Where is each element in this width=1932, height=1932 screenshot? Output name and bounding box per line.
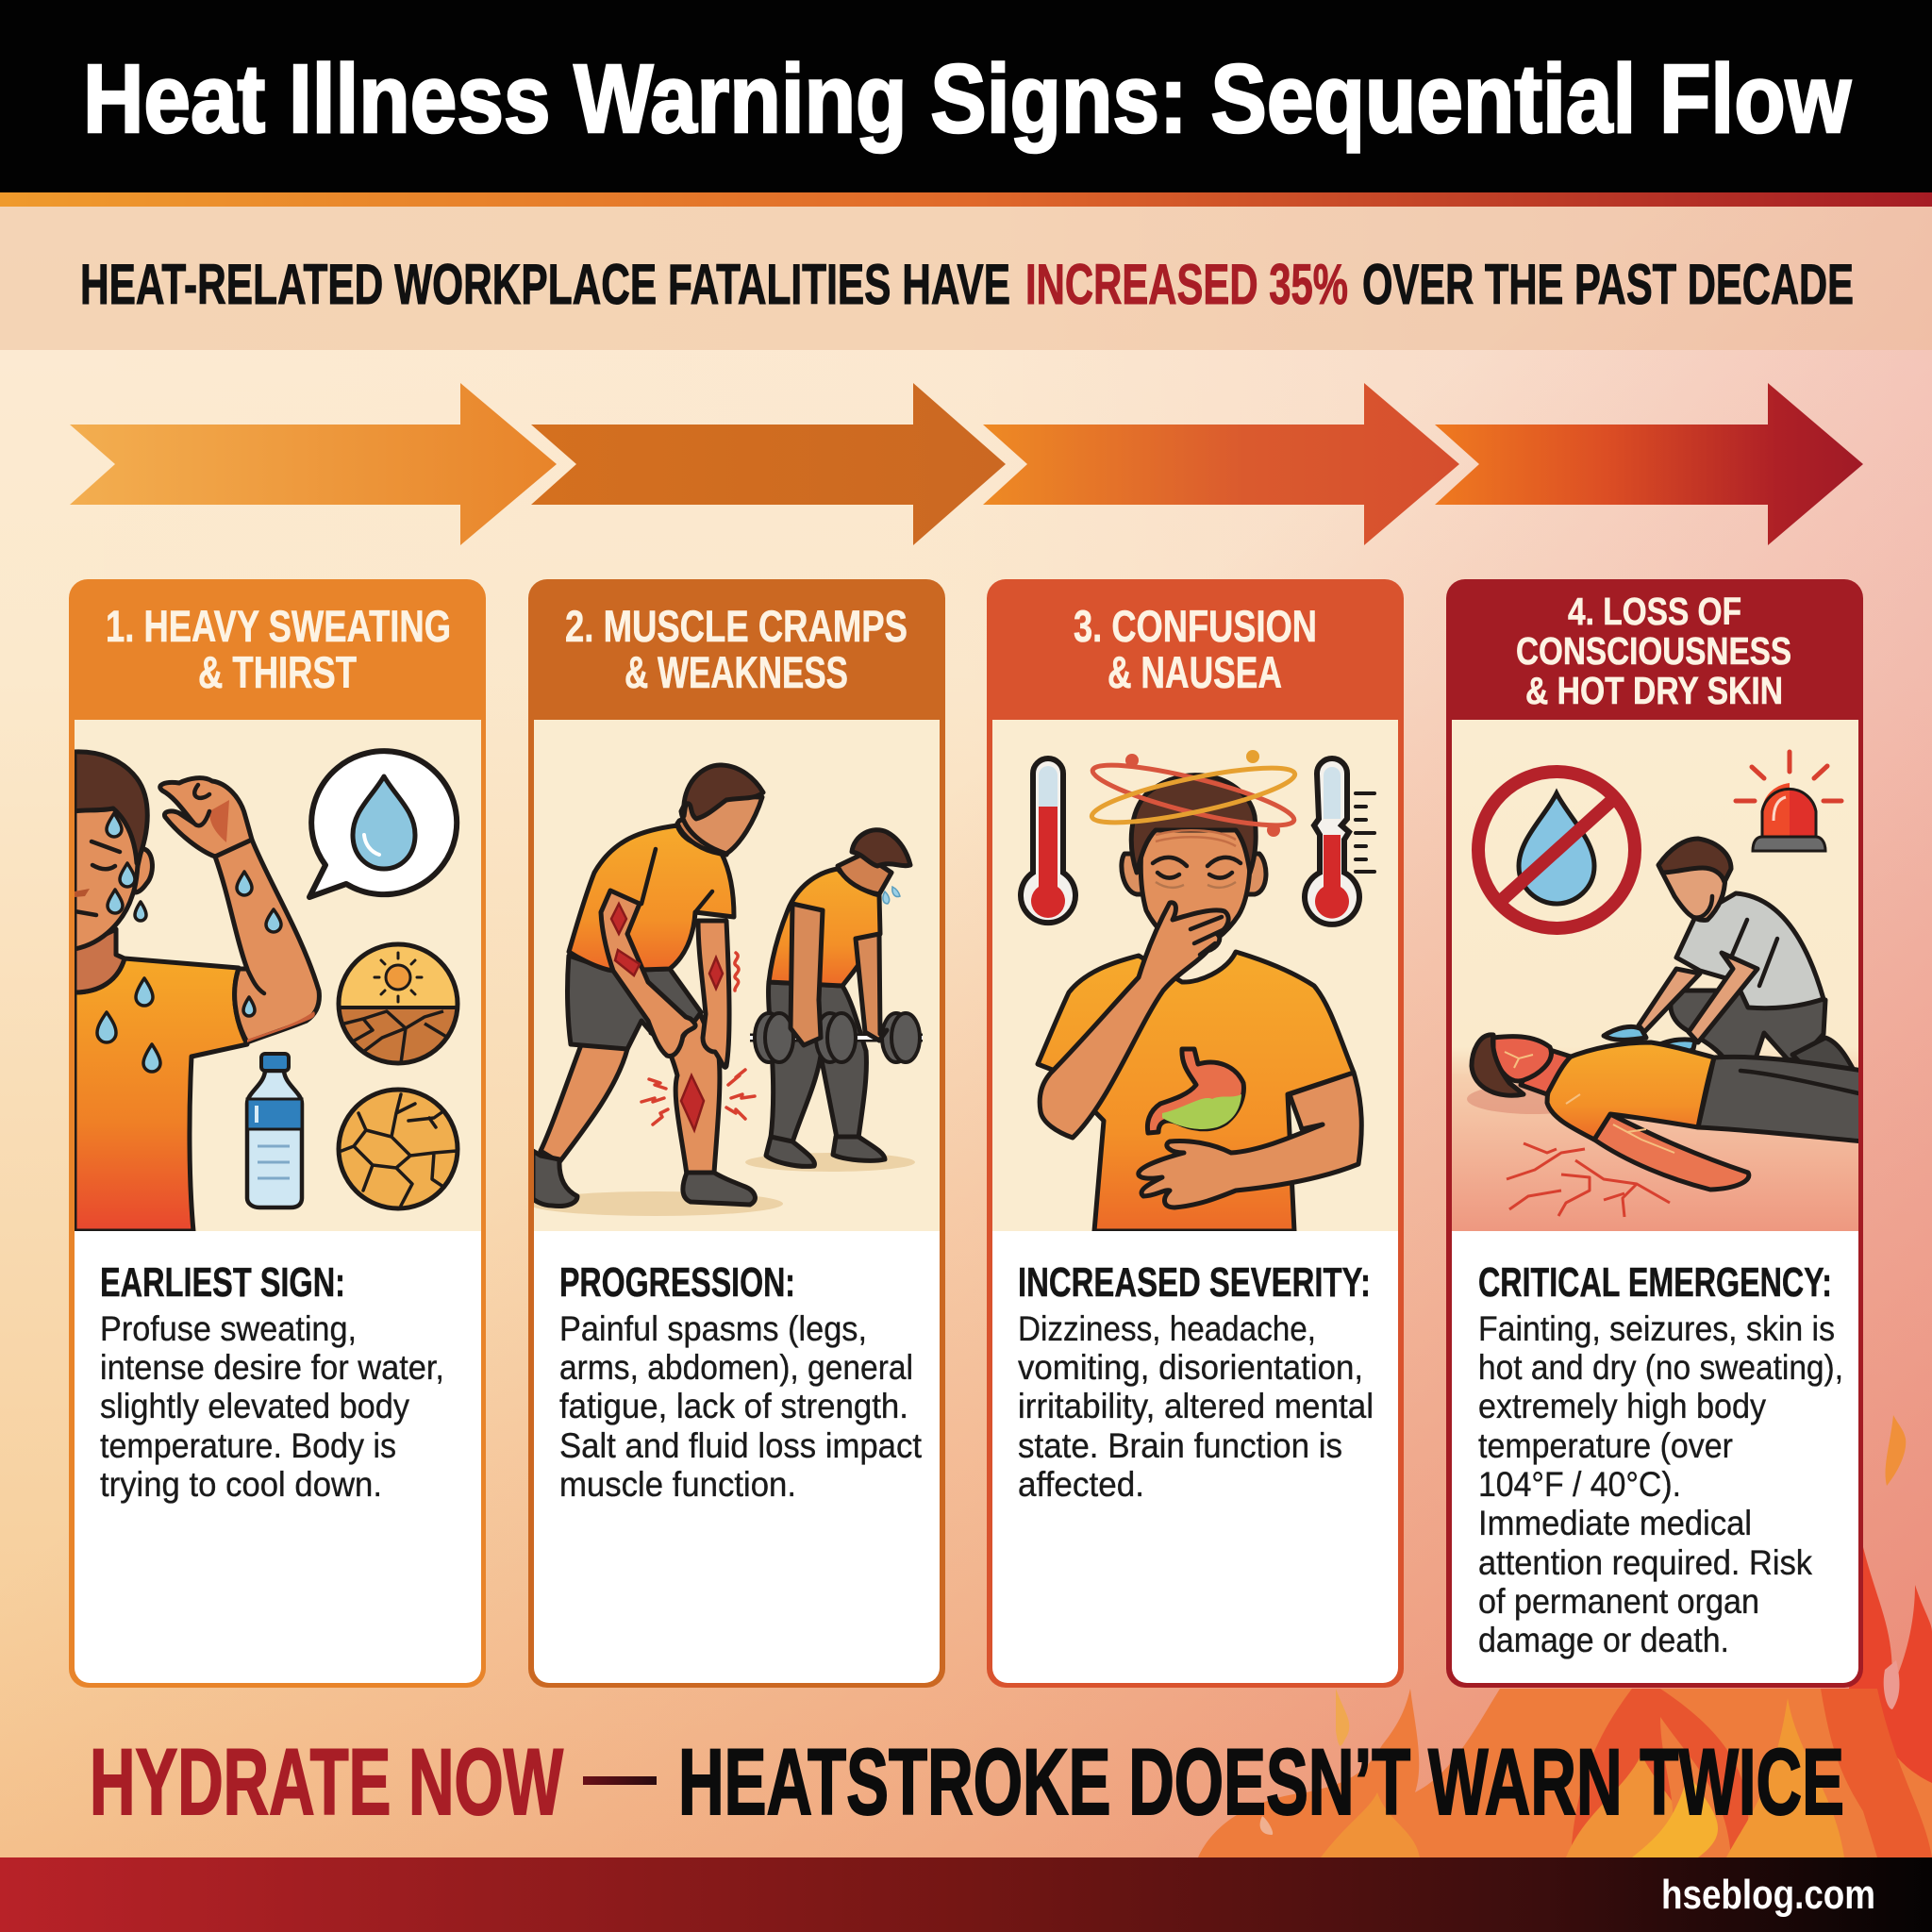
- description: increased severity: affected.: [1018, 1464, 1144, 1504]
- description: earliest sign: slightly elevated body: [100, 1386, 409, 1425]
- description: progression: [534, 1231, 940, 1683]
- statistic banner: [0, 207, 1932, 350]
- shadow and floor cracks: [1467, 1084, 1670, 1217]
- large figure with cramps: [533, 765, 763, 1207]
- description: progression: Painful spasms (legs,: [559, 1308, 867, 1348]
- icon: thermometer broken: [1305, 758, 1374, 924]
- description: earliest sign: [75, 1231, 481, 1683]
- panel: step 4 loss of consciousness: [1446, 579, 1863, 1688]
- description: critical emergency: [1452, 1231, 1858, 1683]
- lower hand on abdomen: [1139, 1073, 1361, 1208]
- description: increased severity: Dizziness, headache,: [1018, 1308, 1316, 1348]
- call to action: HYDRATE NOW: [90, 1729, 563, 1834]
- description: increased severity: vomiting, disorientation,: [1018, 1347, 1363, 1387]
- description: increased severity: [992, 1231, 1398, 1683]
- collapsed worker: [1472, 1035, 1863, 1190]
- icon: water bottle: [247, 1054, 302, 1208]
- worker figure: [75, 752, 319, 1231]
- icon: stomach: [1147, 1049, 1243, 1133]
- icon: cracked earth: [339, 1090, 458, 1208]
- illustration: cramping workers: [528, 720, 940, 1231]
- panel: step 1 heavy sweating: [69, 579, 486, 1688]
- step 4 heading: CONSCIOUSNESS: [1516, 629, 1791, 673]
- description: critical emergency: temperature (over: [1478, 1425, 1733, 1465]
- step 4 heading: [1516, 590, 1791, 712]
- description: progression: fatigue, lack of strength.: [559, 1386, 908, 1425]
- description: earliest sign: trying to cool down.: [100, 1464, 382, 1504]
- icon: emergency siren: [1736, 752, 1841, 851]
- icon: no water sign: [1478, 772, 1635, 928]
- small figure lifting dumbbells: [750, 830, 923, 1166]
- step 1 heading: 1. HEAVY SWEATING: [106, 601, 451, 651]
- step 3 heading: [1074, 601, 1317, 697]
- description: progression: Salt and fluid loss impact: [559, 1425, 923, 1465]
- panel: step 3 confusion: [987, 579, 1404, 1688]
- illustration: collapsed worker and first aider: [1452, 720, 1863, 1231]
- description: earliest sign: EARLIEST SIGN:: [100, 1259, 345, 1306]
- description: critical emergency: Immediate medical: [1478, 1503, 1752, 1542]
- statistic banner: HEAT-RELATED WORKPLACE FATALITIES HAVE: [80, 253, 1010, 316]
- icon: sweat drops: [97, 813, 281, 1072]
- icon: thermometer normal: [1021, 758, 1075, 923]
- step 3 heading: & NAUSEA: [1108, 647, 1282, 697]
- icon: pain bolts: [641, 953, 755, 1124]
- description: earliest sign: intense desire for water,: [100, 1347, 444, 1387]
- illustration: sweating worker: [75, 720, 481, 1231]
- step 1 heading: & THIRST: [198, 647, 357, 697]
- description: increased severity: INCREASED SEVERITY:: [1018, 1259, 1371, 1306]
- icon: dizziness rings: [1089, 750, 1298, 837]
- statistic banner: INCREASED 35%: [1025, 253, 1348, 316]
- nausea hand and arm: [1040, 903, 1228, 1138]
- description: increased severity: irritability, altered mental: [1018, 1386, 1374, 1425]
- description: critical emergency: 104°F / 40°C).: [1478, 1464, 1681, 1504]
- description: critical emergency: hot and dry (no sweating),: [1478, 1347, 1843, 1387]
- card frame: [69, 579, 486, 1688]
- step 2 heading: & WEAKNESS: [625, 647, 848, 697]
- first aider: [1604, 839, 1857, 1075]
- description: earliest sign: temperature. Body is: [100, 1425, 396, 1465]
- icon: thirst speech bubble: [309, 751, 457, 897]
- sequential flow arrows: [70, 383, 1863, 545]
- description: progression: muscle function.: [559, 1464, 796, 1504]
- step 4 heading: & HOT DRY SKIN: [1525, 669, 1783, 712]
- footer bar with site name: [0, 1857, 1932, 1932]
- nauseous figure: [1038, 775, 1361, 1231]
- illustration: nauseous worker: [992, 720, 1398, 1231]
- call to action: [90, 1729, 1844, 1834]
- step 3 heading: 3. CONFUSION: [1074, 601, 1317, 651]
- flames decoration: [1198, 1415, 1932, 1857]
- description: critical emergency: attention required. Risk: [1478, 1542, 1812, 1582]
- description: earliest sign: Profuse sweating,: [100, 1308, 357, 1348]
- card frame: [1446, 579, 1863, 1688]
- card frame: [987, 579, 1404, 1688]
- description: critical emergency: extremely high body: [1478, 1386, 1766, 1425]
- step 2 heading: [565, 601, 908, 697]
- description: progression: arms, abdomen), general: [559, 1347, 913, 1387]
- icon: dumbbell: [750, 1013, 923, 1062]
- footer bar with site name: hseblog.com: [1661, 1872, 1875, 1918]
- description: progression: PROGRESSION:: [559, 1259, 795, 1306]
- card frame: [528, 579, 945, 1688]
- title banner: [0, 0, 1932, 207]
- icon: sun over cracked ground: [339, 944, 458, 1063]
- description: increased severity: state. Brain function is: [1018, 1425, 1342, 1465]
- panel: step 2 muscle cramps: [528, 579, 945, 1688]
- description: critical emergency: damage or death.: [1478, 1620, 1729, 1659]
- description: critical emergency: of permanent organ: [1478, 1581, 1759, 1621]
- icon: cramp marks: [611, 904, 723, 1130]
- step 2 heading: 2. MUSCLE CRAMPS: [565, 601, 908, 651]
- description: critical emergency: Fainting, seizures, skin is: [1478, 1308, 1835, 1348]
- step 4 heading: 4. LOSS OF: [1568, 590, 1741, 633]
- step 1 heading: [106, 601, 451, 697]
